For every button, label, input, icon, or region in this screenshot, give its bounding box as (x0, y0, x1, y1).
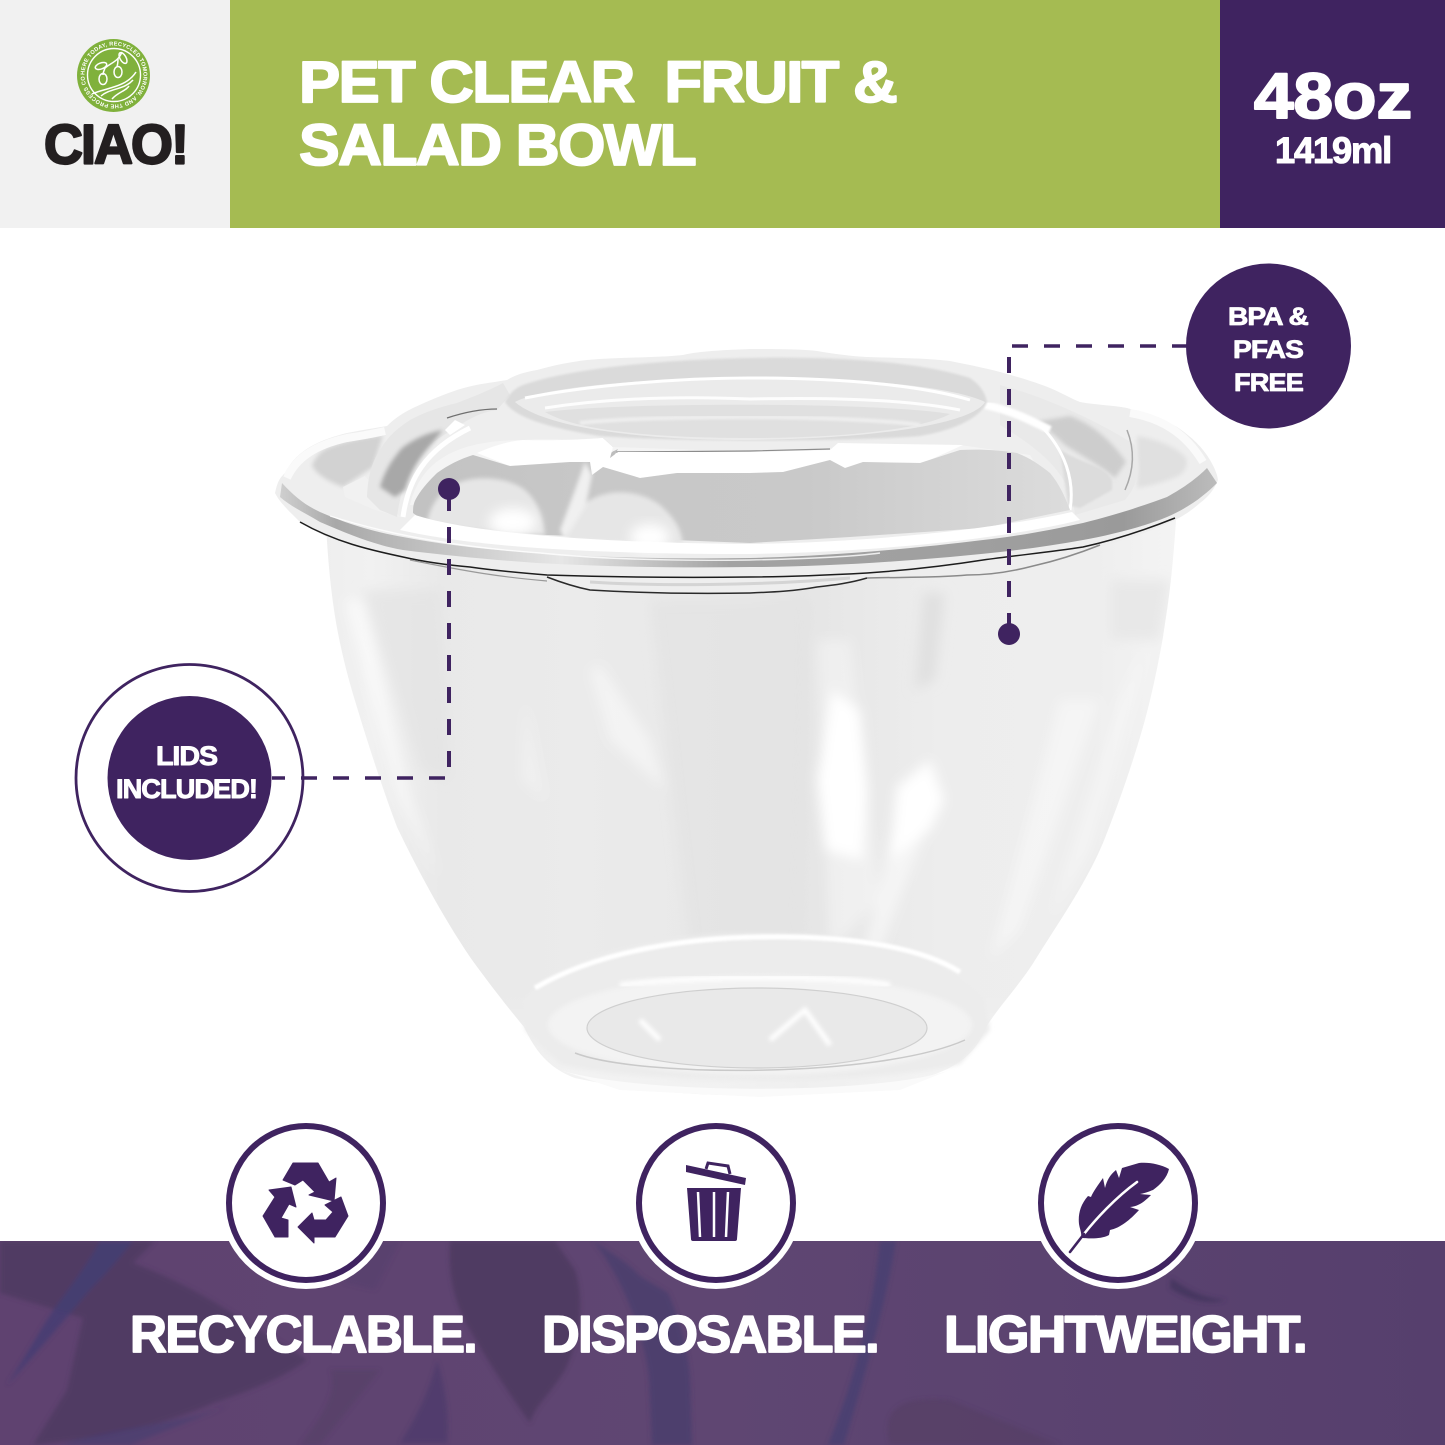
logo panel (0, 0, 230, 228)
callout text (1228, 303, 1309, 397)
bowl base rings (524, 933, 990, 1097)
crease fold (603, 438, 618, 460)
callout ring (76, 664, 303, 892)
dome left shoulder (367, 383, 510, 517)
callout disc (1186, 264, 1351, 428)
lid middle crease line (613, 449, 830, 452)
rim top edge highlight (287, 413, 1203, 478)
white band under recess (477, 438, 963, 478)
callout text: BPA & (1228, 303, 1309, 331)
icon: recycle (220, 1117, 392, 1289)
title: SALAD BOWL (299, 113, 695, 178)
lower lid reflection (413, 450, 1070, 543)
callout leader line (272, 478, 460, 778)
lid front lip (400, 512, 1080, 554)
dome right shoulder (985, 385, 1138, 515)
label: LIGHTWEIGHT. (944, 1306, 1306, 1364)
callout text (116, 741, 257, 804)
leaf background (0, 1241, 1226, 1445)
callout text: LIDS (156, 741, 217, 771)
logo badge (77, 39, 150, 112)
recyclable feature (130, 1117, 476, 1364)
clear bowl with lid (275, 349, 1218, 1110)
flange inner shading (590, 578, 850, 585)
bottom feature band (0, 1117, 1445, 1445)
size text: 48oz (1254, 60, 1412, 132)
disposable feature (542, 1117, 878, 1364)
bowl body (320, 520, 1180, 1110)
header band (0, 0, 1445, 228)
callout disc (108, 696, 272, 860)
title: PET CLEAR FRUIT & (299, 50, 897, 115)
callout leader line (998, 346, 1187, 645)
label: DISPOSABLE. (542, 1306, 878, 1364)
logo wordmark: CIAO! (44, 112, 187, 176)
title (299, 50, 897, 178)
lid and rim silhouette (275, 349, 1218, 593)
size text: 1419ml (1275, 130, 1391, 171)
label: RECYCLABLE. (130, 1306, 476, 1364)
callout: lids included (76, 478, 460, 892)
dome front band (410, 439, 1060, 520)
rim band grey (280, 468, 1217, 567)
lid top recess (505, 358, 987, 440)
title panel (230, 0, 1220, 228)
rim right tray (1137, 436, 1187, 488)
icon: trash can (630, 1117, 802, 1289)
callout: BPA and PFAS free (998, 264, 1351, 645)
callout text: FREE (1234, 369, 1303, 397)
lightweight feature (944, 1117, 1306, 1364)
reflection lobes (427, 462, 683, 550)
size panel (1220, 0, 1445, 228)
rim black lines (300, 518, 1175, 593)
lid (275, 349, 1218, 593)
size text (1254, 60, 1412, 171)
rim band highlights (330, 516, 880, 560)
icon: feather (1032, 1117, 1204, 1289)
rim left tray (312, 435, 383, 487)
callout text: INCLUDED! (116, 774, 257, 804)
callout text: PFAS (1233, 336, 1303, 364)
rim left tray inner (343, 476, 400, 517)
